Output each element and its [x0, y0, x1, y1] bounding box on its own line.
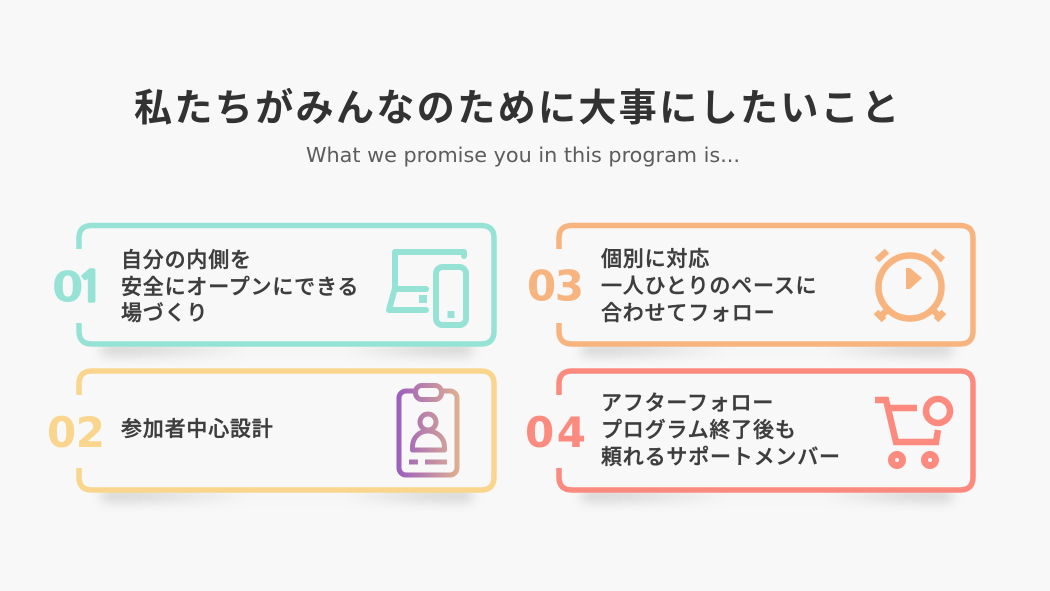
- number 01: 1: [77, 266, 104, 308]
- icon: shopping cart: [875, 399, 950, 466]
- text 01: 自分の内側を: [121, 249, 252, 272]
- card shadow 01: [102, 344, 472, 355]
- panel: 02: [47, 371, 494, 501]
- text 04: 頼れるサポートメンバー: [601, 446, 841, 469]
- card shadow 04: [582, 490, 952, 501]
- text 03: 合わせてフォロー: [601, 302, 775, 325]
- number 02: 02: [47, 408, 105, 457]
- card frame 02: [79, 371, 494, 490]
- text 04: プログラム終了後も: [601, 419, 797, 442]
- text 04: アフターフォロー: [601, 392, 774, 415]
- title: 私たちがみんなのために大事にしたいこと: [134, 88, 902, 130]
- panel: 03: [527, 226, 973, 355]
- card frame 04: [559, 371, 973, 490]
- icon: alarm clock: [876, 251, 944, 320]
- number 01: 0: [52, 263, 84, 312]
- text 01: 安全にオープンにできる: [121, 276, 359, 299]
- text 03: 個別に対応: [601, 248, 710, 271]
- panel: 04: [525, 371, 973, 501]
- number 03: 03: [527, 262, 584, 310]
- card shadow 03: [582, 344, 952, 355]
- text 01: 場づくり: [121, 302, 208, 325]
- icon: laptop and phone: [389, 252, 466, 325]
- icon: ID clipboard: [399, 386, 457, 475]
- card frame 03: [559, 226, 973, 344]
- subtitle: What we promise you in this program is...: [306, 143, 740, 167]
- text 03: 一人ひとりのペースに: [601, 275, 817, 298]
- number 04: 04: [525, 408, 586, 457]
- card shadow 02: [102, 490, 472, 501]
- panel: 01: [52, 226, 494, 355]
- card frame 01: [79, 226, 494, 344]
- text 02: 参加者中心設計: [121, 418, 274, 441]
